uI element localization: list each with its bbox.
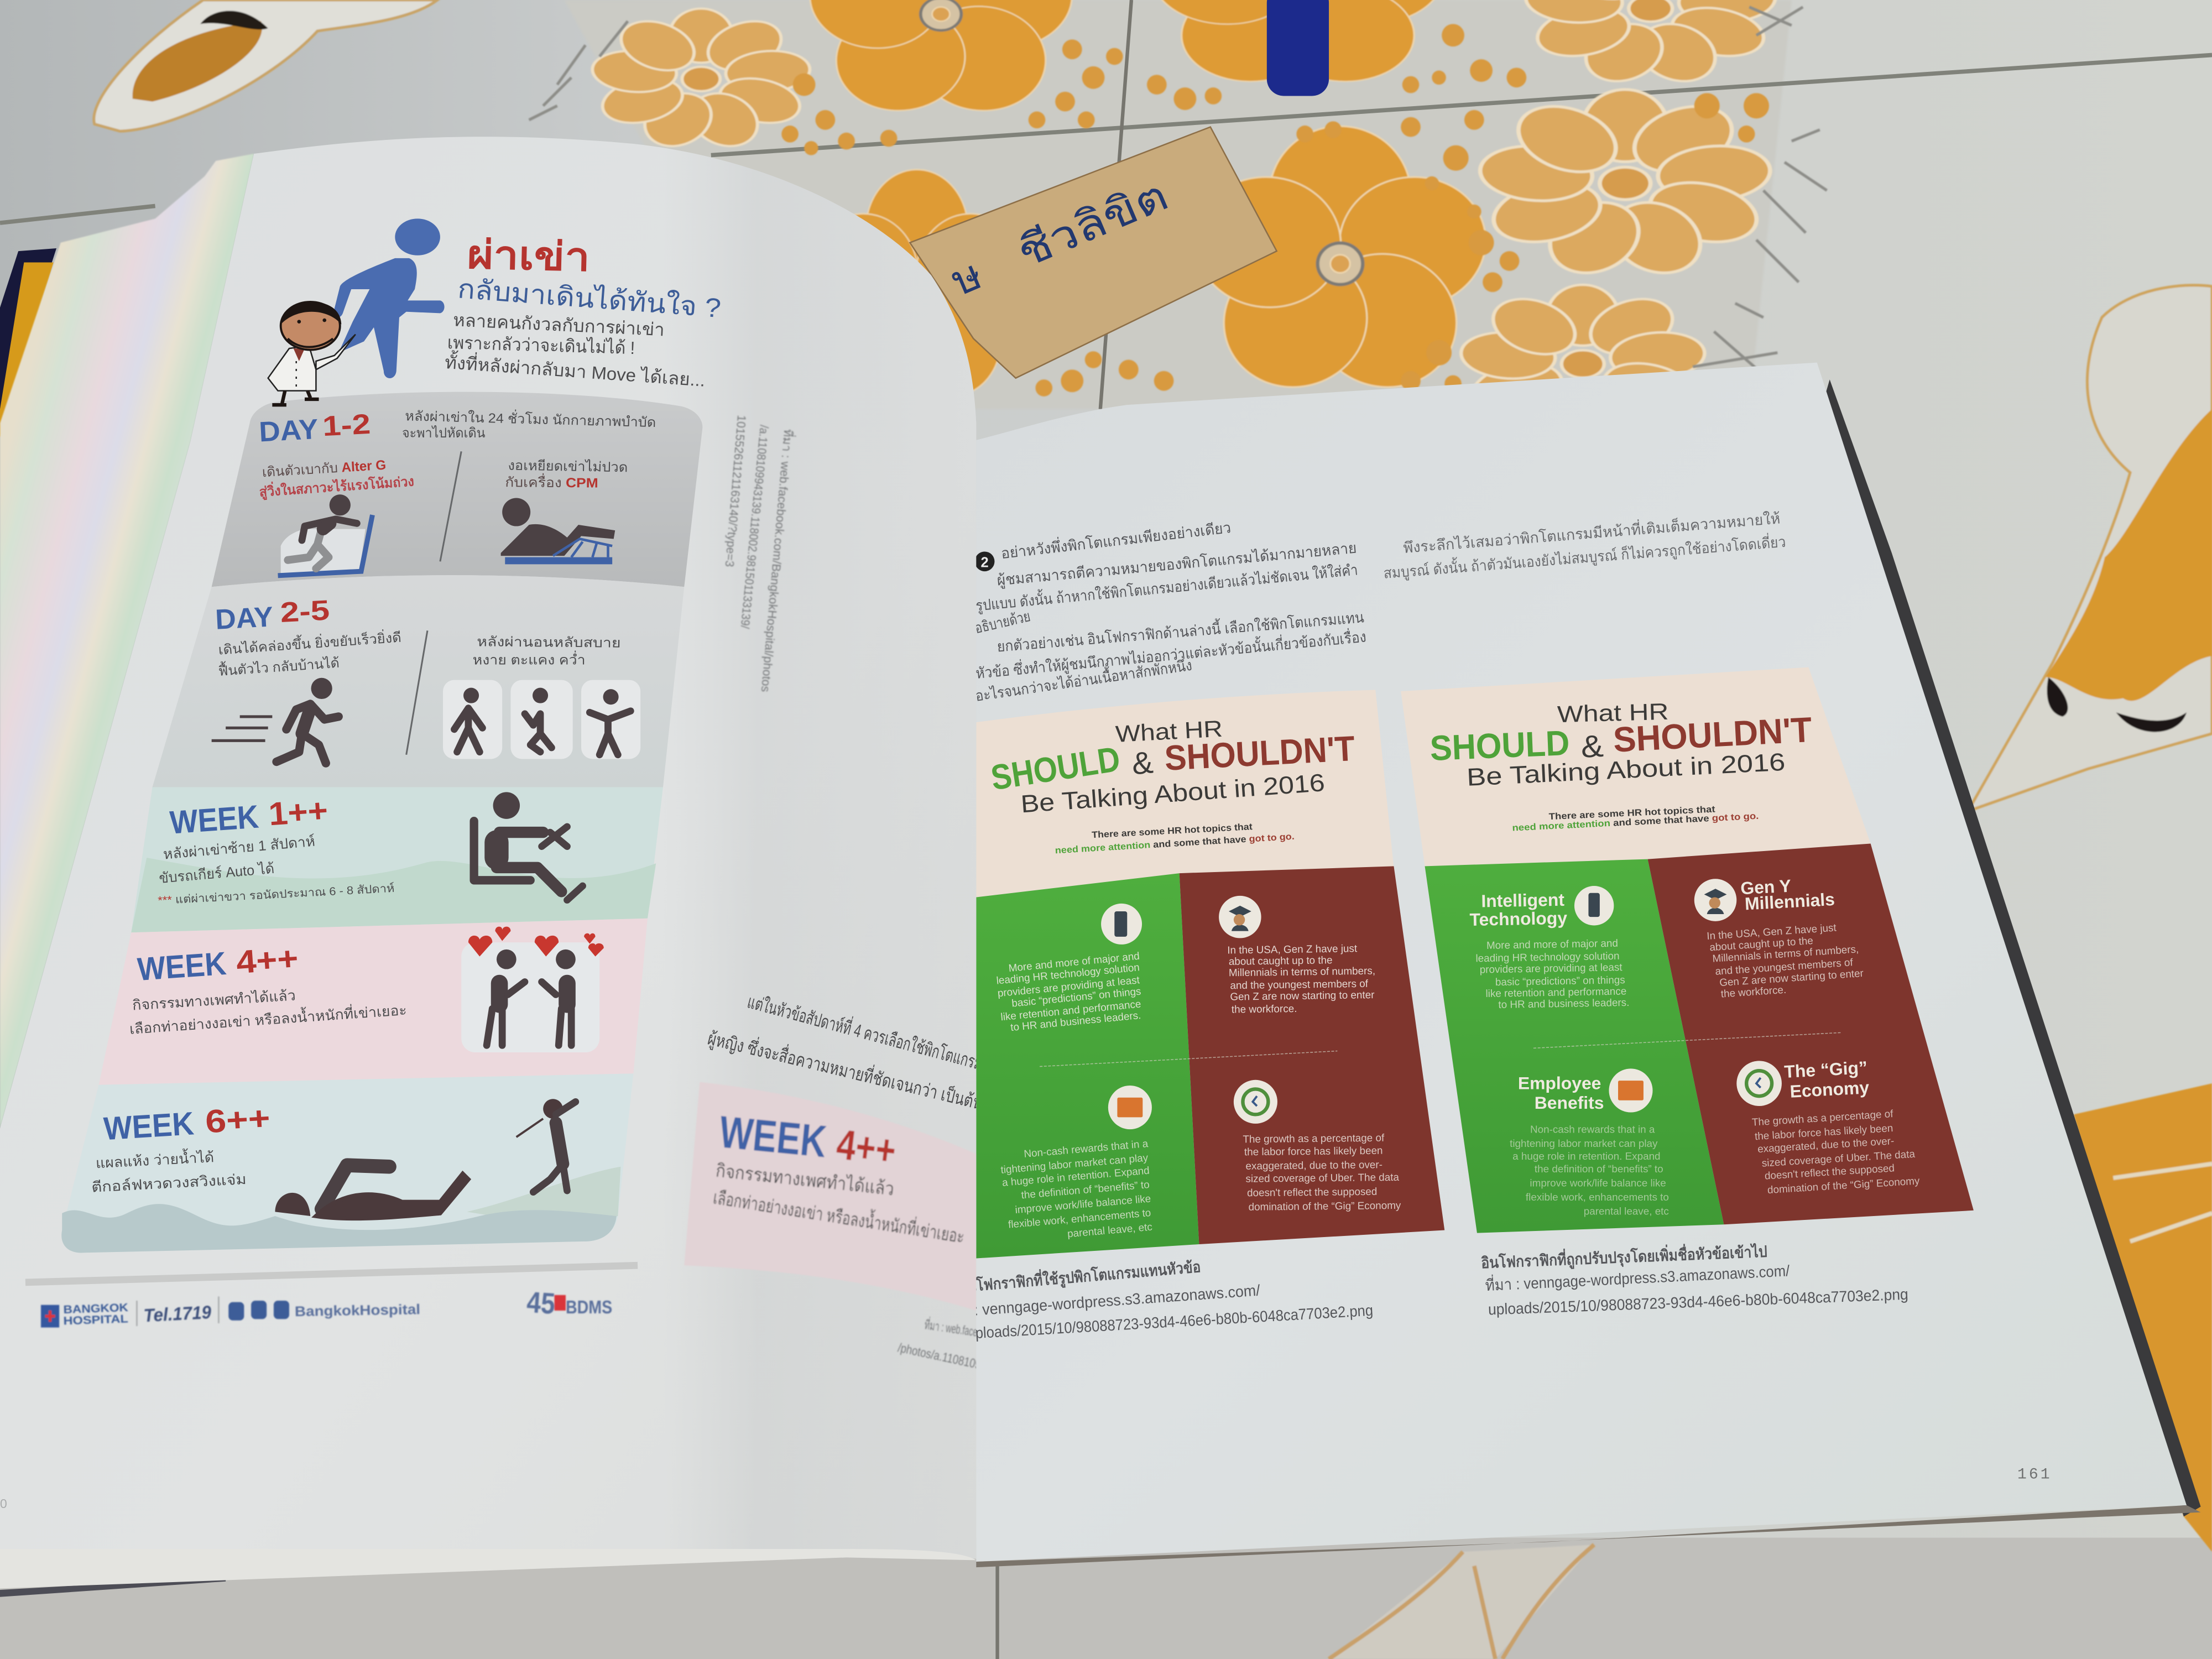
vertical source text	[723, 415, 796, 693]
day 2-5 walking text	[218, 628, 402, 679]
blue marker	[1267, 0, 1329, 96]
icon: CPM machine	[501, 498, 615, 561]
day 1-2 description	[402, 406, 656, 441]
CPM text	[505, 457, 628, 491]
floor decoration: orange flowers	[587, 0, 1781, 446]
infographic 1 red text 2: domination of the “Gig” Economy	[1248, 1199, 1401, 1213]
day 1-2 description: จะพาไปหัดเดิน	[402, 425, 486, 441]
infographic 2 red text 2: exaggerated, due to the over-	[1757, 1135, 1895, 1155]
body text column 1: หัวข้อ ซึ่งทำให้ผู้ชมนึกภาพไม่ออกว่าแต่ละหัวข้อนั้นเกี่ยวข้องกับเรื่อง	[975, 626, 1367, 682]
infographic 1 title: What HR	[1115, 716, 1223, 747]
infographic 2 title: Be Talking About in 2016	[1466, 749, 1786, 791]
week 4 text: เลือกท่าอย่างงอเข่า หรือลงน้ำหนักที่เข่าเยอะ	[129, 1000, 407, 1037]
infographic 2 green text 2: flexible work, enhancements to	[1526, 1191, 1669, 1203]
caption right: อินโฟกราฟิกที่ถูกปรับปรุงโดยเพิ่มชื่อหัวข้อเข้าไป	[1480, 1240, 1767, 1272]
infographic 2 red text 1: Millennials in terms of numbers,	[1712, 943, 1859, 964]
day 2-5 sleeping text: หงาย ตะแคง คว่ำ	[473, 651, 586, 668]
infographic 1 red text 1: about caught up to the	[1229, 954, 1333, 967]
caption right: uploads/2015/10/98088723-93d4-46e6-b80b-6048ca7703e2.png	[1488, 1286, 1908, 1318]
day 1-2 heading	[258, 408, 371, 447]
infographic 1 red text 2	[1243, 1132, 1401, 1213]
icon: anti-gravity treadmill	[278, 494, 372, 576]
infographic 2 title	[1429, 698, 1813, 833]
infographic 1 title: need more attention and some that have got to go.	[1055, 831, 1295, 855]
footer rule	[25, 1265, 638, 1282]
panel: day 1-2	[212, 392, 702, 587]
day 2-5 sleeping text: หลังผ่านอนหลับสบาย	[477, 634, 621, 651]
left page heading: ทั้งที่หลังผ่ากลับมา Move ได้เลย...	[444, 349, 706, 390]
icon: golfer	[517, 1099, 576, 1192]
infographic 2 red text 1: In the USA, Gen Z have just	[1707, 921, 1837, 942]
left page heading	[444, 233, 722, 390]
infographic 2 headings: Benefits	[1535, 1093, 1604, 1113]
infographic 2 title: SHOULDN'T	[1612, 709, 1813, 760]
infographic 2 title: need more attention and some that have got to go.	[1512, 811, 1759, 833]
callout: week 4 sample: 4++	[834, 1121, 899, 1175]
day 1-2 heading: 1-2	[322, 408, 371, 442]
infographic 2 green text 2: tightening labor market can play	[1510, 1138, 1658, 1149]
infographic 2 red text 2: sized coverage of Uber. The data	[1761, 1148, 1916, 1169]
infographic 2 headings: Employee	[1518, 1073, 1601, 1093]
source text under callout: ที่มา : web.facebook	[924, 1316, 996, 1342]
caption left	[941, 1255, 1374, 1342]
callout: week 4 sample: กิจกรรมทางเพศทำได้แล้ว	[715, 1160, 895, 1199]
infographic 1 green text 1: to HR and business leaders.	[1010, 1009, 1141, 1033]
body text: week 4 explanation: ผู้หญิง ซึ่งจะสื่อความหมายที่ชัดเจนกว่า เป็นต้น	[706, 1026, 985, 1115]
body text column 2	[1383, 508, 1786, 582]
body text column 1: รูปแบบ ดังนั้น ถ้าหากใช้พิกโตแกรมอย่างเดียวแล้วไม่ชัดเจน ให้ใส่คำ	[975, 559, 1359, 615]
week 6 text: ตีกอล์ฟหวดวงสวิงแจ่ม	[91, 1171, 247, 1196]
body text column 1: ผู้ชมสามารถตีความหมายของพิกโตแกรมได้มากมายหลาย	[996, 540, 1358, 589]
infographic 1 red text 1: Gen Z are now starting to enter	[1230, 989, 1375, 1003]
week 4 heading: WEEK	[136, 946, 227, 988]
infographic 1 green text 1: leading HR technology solution	[996, 961, 1140, 987]
icon: three sleeping positions	[443, 680, 640, 759]
infographic 1 green text 2: improve work/life balance like	[1015, 1193, 1151, 1215]
infographic 1 red text 2: sized coverage of Uber. The data	[1245, 1171, 1400, 1185]
infographic 1 title: &	[1130, 744, 1155, 781]
week 1 heading: 1++	[268, 792, 329, 832]
body text column 1: ยกตัวอย่างเช่น อินโฟกราฟิกด้านล่างนี้ เลือกใช้พิกโตแกรมแทน	[996, 607, 1365, 655]
infographic 2 green text 1	[1475, 937, 1629, 1010]
infographic 2 red text 1: Gen Z are now starting to enter	[1719, 967, 1864, 988]
week 4 text	[129, 988, 407, 1037]
infographic 2 headings: Gen Y	[1740, 876, 1792, 898]
panel: week 4	[99, 919, 648, 1085]
floor decoration: top-left fish	[94, 0, 437, 131]
CPM text: งอเหยียดเข่าไม่ปวด	[508, 457, 628, 475]
infographic 1 red text 2: exaggerated, due to the over-	[1245, 1159, 1383, 1172]
infographic 1 red text 2: The growth as a percentage of	[1243, 1132, 1385, 1145]
footer logos: HOSPITAL	[63, 1313, 128, 1327]
caption left: อินโฟกราฟิกที่ใช้รูปพิกโตแกรมแทนหัวข้อ	[958, 1255, 1202, 1297]
caption right: ที่มา : venngage-wordpress.s3.amazonaws.com/	[1485, 1260, 1790, 1294]
day 2-5 heading: DAY	[215, 601, 274, 635]
infographic 1 red text 2: the labor force has likely been	[1244, 1145, 1383, 1157]
infographic 1 green text 2: tightening labor market can play	[1000, 1152, 1149, 1176]
infographic 1 red text 1: In the USA, Gen Z have just	[1227, 942, 1358, 956]
infographic 2 headings: Technology	[1469, 908, 1568, 930]
infographic 1 green text 2: flexible work, enhancements to	[1008, 1207, 1151, 1230]
infographic 2 icons	[1574, 879, 1782, 1112]
infographic 1 green text 1: basic “predictions” on things	[1011, 985, 1141, 1009]
floor decoration: small floral dots and fronds	[529, 7, 1827, 397]
floor decoration: right orange fish	[1968, 285, 2212, 1552]
icon: doctor character	[268, 302, 356, 405]
footer logos: BANGKOK	[63, 1302, 129, 1316]
infographic 2 headings	[1469, 876, 1870, 1113]
body text: week 4 explanation	[706, 989, 985, 1115]
infographic 2 green text 2: improve work/life balance like	[1530, 1177, 1666, 1188]
day 2-5 walking text: เดินได้คล่องขึ้น ยิ่งขยับเร็วยิ่งดี	[218, 628, 402, 658]
body text: week 4 explanation: แต่ในหัวข้อสัปดาห์ที่ 4 ควรเลือกใช้พิกโตแกรม	[745, 989, 985, 1074]
cardboard tag: ชีวลิขิต	[1011, 171, 1175, 276]
week 6 text	[91, 1147, 247, 1196]
infographic 1 red text 1: the workforce.	[1232, 1003, 1297, 1015]
icon: blue walking man	[334, 218, 445, 378]
infographic 1 title	[988, 716, 1356, 855]
week 1 heading: WEEK	[169, 799, 260, 841]
body text column 2: สมบูรณ์ ดังนั้น ถ้าตัวมันเองยังไม่สมบูรณ์ ก็ไม่ควรถูกใช้อย่างโดดเดี่ยว	[1383, 531, 1786, 582]
infographic 2 red text 1: the workforce.	[1720, 984, 1787, 1000]
infographic 2 red text 2	[1751, 1108, 1920, 1196]
infographic 1 green text 2	[1000, 1138, 1153, 1239]
icon: couple with hearts	[461, 927, 604, 1052]
caption left: ที่มา : venngage-wordpress.s3.amazonaws.com/	[941, 1279, 1261, 1321]
left page heading: เพราะกลัวว่าจะเดินไม่ได้ !	[447, 332, 635, 358]
footer logos: BDMS	[566, 1297, 612, 1318]
page: left	[0, 127, 996, 1588]
vertical source text: /a.1108109943139.118002.981501133139/	[738, 424, 771, 630]
infographic 2 title: There are some HR hot topics that	[1548, 804, 1715, 822]
day 1-2 heading: DAY	[258, 413, 319, 447]
infographic 1 red text 2: doesn't reflect the supposed	[1247, 1186, 1377, 1198]
week 1 text: หลังผ่าเข่าซ้าย 1 สัปดาห์	[163, 833, 316, 863]
infographic 2 green text 1: to HR and business leaders.	[1498, 997, 1629, 1010]
infographic 2 green text 2	[1510, 1123, 1669, 1217]
body text column 1: อย่าหวังพึ่งพิกโตแกรมเพียงอย่างเดียว	[1000, 517, 1232, 562]
callout: week 4 sample	[684, 1082, 976, 1311]
icon: running man	[212, 678, 338, 763]
infographic 2 title: &	[1580, 728, 1604, 764]
infographic 1 green text 1: providers are providing at least	[997, 974, 1140, 999]
infographic 2 headings: Economy	[1790, 1077, 1870, 1102]
footer logos: Tel.1719	[143, 1302, 212, 1326]
infographic 2 green text 1: basic “predictions” on things	[1495, 974, 1625, 988]
icon: swimmer	[275, 1165, 468, 1218]
infographic 2 red text 2: the labor force has likely been	[1754, 1122, 1893, 1142]
infographic 2 green text 2: Non-cash rewards that in a	[1530, 1123, 1655, 1135]
infographic 2 red text 1: about caught up to the	[1709, 935, 1813, 953]
infographic 1 green text 2: parental leave, etc	[1067, 1221, 1153, 1239]
left page heading: ผ่าเข่า	[467, 233, 591, 280]
week 1 text: *** แต่ผ่าเข่าขวา รอนัดประมาณ 6 - 8 สัปดาห์	[158, 882, 395, 907]
week 6 text: แผลแห้ง ว่ายน้ำได้	[95, 1147, 215, 1171]
infographic 2 red text 1	[1707, 921, 1864, 1000]
infographic 2 headings: The “Gig”	[1784, 1057, 1868, 1082]
infographic 2 green text 1: leading HR technology solution	[1475, 950, 1620, 964]
infographic 2 green text 1: providers are providing at least	[1480, 961, 1623, 975]
day 1-2 description: หลังผ่าเข่าใน 24 ชั่วโมง นักกายภาพบำบัด	[405, 406, 656, 430]
infographic 1	[976, 690, 1444, 1259]
infographic 1 title: SHOULD	[988, 739, 1123, 797]
floor decoration: orange line bottom	[1329, 1545, 1594, 1659]
infographic 1 green text 1	[996, 950, 1141, 1033]
week 6 heading: WEEK	[103, 1105, 195, 1147]
infographic 1 green text 1: like retention and performance	[1000, 998, 1141, 1022]
infographic 2 green text 2: the definition of “benefits” to	[1535, 1163, 1663, 1175]
body text column 1: อะไรจนกว่าจะได้อ่านเนื้อหาสักพักหนึ่ง	[974, 655, 1193, 705]
caption left: uploads/2015/10/98088723-93d4-46e6-b80b-6048ca7703e2.png	[967, 1302, 1374, 1342]
panel: week 1	[131, 787, 663, 932]
callout: week 4 sample: WEEK	[717, 1107, 828, 1167]
body text column 2: พึงระลึกไว้เสมอว่าพิกโตแกรมมีหน้าที่เติมเต็มความหมายให้	[1402, 508, 1781, 556]
body text column 1: อธิบายด้วย	[973, 608, 1032, 637]
panel: week 6	[61, 1073, 633, 1253]
Alter G text: เดินตัวเบากับ Alter G	[262, 458, 387, 480]
infographic 1 green text 2: the definition of “benefits” to	[1021, 1178, 1150, 1201]
caption right	[1480, 1240, 1908, 1318]
infographic 2 title: What HR	[1557, 698, 1669, 727]
left page heading: กลับมาเดินได้ทันใจ ?	[457, 273, 722, 324]
left page heading: หลายคนกังวลกับการผ่าเข่า	[453, 310, 665, 340]
infographic 1 title: SHOULDN'T	[1164, 728, 1356, 778]
infographic 1 title: There are some HR hot topics that	[1092, 821, 1253, 840]
day 2-5 walking text: ฟื้นตัวไว กลับบ้านได้	[218, 653, 340, 679]
infographic 2 green text 2: a huge role in retention. Expand	[1512, 1150, 1661, 1162]
day 2-5 heading: 2-5	[279, 594, 330, 628]
Alter G text: สู่วิ่งในสภาวะไร้แรงโน้มถ่วง	[259, 471, 415, 500]
week 1 heading	[169, 792, 329, 841]
week 4 heading	[136, 941, 299, 988]
week 1 text: ขับรถเกียร์ Auto ได้	[158, 860, 275, 886]
bullet number 2	[975, 551, 994, 571]
infographic 1 icons	[1101, 896, 1277, 1129]
infographic 2 red text 1: and the youngest members of	[1715, 956, 1854, 977]
body text column 1	[973, 517, 1367, 705]
week 1 text	[158, 833, 395, 907]
infographic 2 green text 1: like retention and performance	[1485, 985, 1626, 999]
cardboard tag	[910, 127, 1277, 378]
day 2-5 sleeping text	[473, 634, 621, 668]
book: hard cover and page stack	[0, 154, 254, 1597]
infographic 1 red text 1: and the youngest members of	[1230, 978, 1369, 991]
infographic 2 title: SHOULD	[1429, 723, 1571, 768]
vertical source text: 10155261121163140/?type=3	[723, 415, 749, 567]
week 4 heading: 4++	[235, 941, 299, 980]
callout: week 4 sample: เลือกท่าอย่างงอเข่า หรือลงน้ำหนักที่เข่าเยอะ	[712, 1183, 966, 1248]
week 4 text: กิจกรรมทางเพศทำได้แล้ว	[132, 988, 296, 1014]
icon: driving man	[474, 792, 583, 900]
infographic 2 red text 2: domination of the “Gig” Economy	[1767, 1175, 1920, 1196]
source text under callout	[896, 1316, 996, 1372]
source text under callout: /photos/a.1108109	[896, 1340, 983, 1372]
infographic 1 green text 1: More and more of major and	[1008, 950, 1140, 974]
infographic 1 title: Be Talking About in 2016	[1020, 769, 1326, 818]
infographic 1 red text 1: Millennials in terms of numbers,	[1229, 965, 1375, 978]
infographic 2 headings: Millennials	[1744, 889, 1835, 914]
vertical source text: ที่มา : web.facebook.com/BangkokHospital/photos	[759, 429, 796, 693]
Alter G text	[259, 458, 415, 500]
infographic 2 red text 2: The growth as a percentage of	[1751, 1108, 1894, 1128]
infographic 2 green text 2: parental leave, etc	[1584, 1205, 1669, 1217]
infographic 2 headings: Intelligent	[1481, 890, 1565, 911]
cardboard tag: ษ	[945, 251, 989, 305]
page number: 161	[2017, 1466, 2050, 1483]
infographic 2 green text 1: More and more of major and	[1486, 937, 1618, 951]
infographic 2	[1401, 667, 1974, 1233]
day 2-5 heading	[215, 594, 330, 635]
infographic 2 red text 2: doesn't reflect the supposed	[1764, 1162, 1895, 1182]
infographic 1 red text 1	[1227, 942, 1375, 1015]
panel: day 2-5	[153, 575, 684, 787]
infographic 1 green text 2: Non-cash rewards that in a	[1024, 1138, 1149, 1160]
footer logos: 45	[526, 1286, 556, 1321]
footer logos: BangkokHospital	[295, 1302, 420, 1319]
footer logos	[41, 1286, 612, 1328]
infographic 1 green text 2: a huge role in retention. Expand	[1001, 1165, 1150, 1188]
CPM text: กับเครื่อง CPM	[505, 473, 598, 491]
page: right	[941, 363, 2201, 1567]
week 6 heading	[103, 1100, 271, 1147]
week 6 heading: 6++	[204, 1100, 271, 1140]
bullet number 2: 2	[981, 555, 989, 571]
